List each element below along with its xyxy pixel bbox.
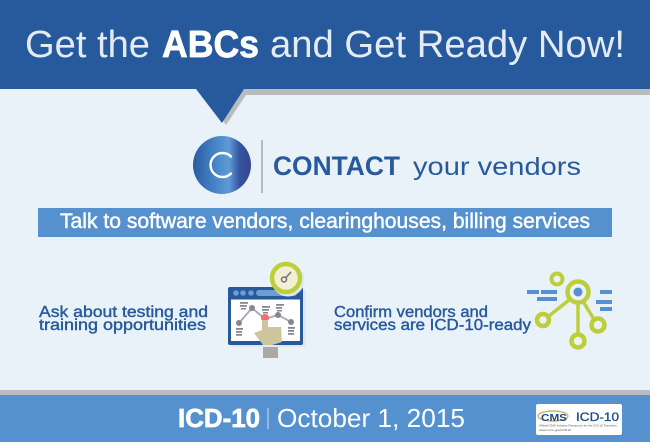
footer date: October 1, 2015	[277, 403, 465, 433]
text: vendors ready: Confirm vendors and	[334, 304, 488, 321]
icon: connected nodes	[527, 274, 612, 348]
text: vendors ready: services are ICD-10-ready	[334, 317, 531, 334]
text: testing and training: training opportunities	[39, 317, 206, 334]
logo: CMS ICD-10: Official CMS Industry Resources for the ICD-10 Transition	[539, 424, 617, 428]
footer date: ICD-10	[178, 403, 260, 433]
logo: CMS ICD-10	[536, 404, 622, 435]
logo: CMS ICD-10: CMS	[541, 413, 567, 424]
icon: letter C badge	[193, 136, 251, 194]
text: testing and training: Ask about testing and	[39, 304, 208, 321]
header banner	[0, 0, 650, 125]
footer band	[0, 390, 650, 442]
logo: CMS ICD-10: ICD-10	[576, 410, 619, 424]
logo: CMS ICD-10: www.cms.gov/ICD10	[539, 428, 571, 432]
title: ABCs	[162, 24, 259, 66]
title: and Get Ready Now!	[270, 24, 625, 66]
subheading bar: Talk to software vendors, clearinghouses, billing services	[60, 210, 590, 233]
title: Get the	[25, 24, 150, 66]
divider	[262, 140, 263, 193]
heading: contact your vendors: your vendors	[413, 153, 581, 181]
icon: chart window with gauge and hand	[228, 264, 306, 358]
heading: contact your vendors: CONTACT	[273, 151, 400, 181]
